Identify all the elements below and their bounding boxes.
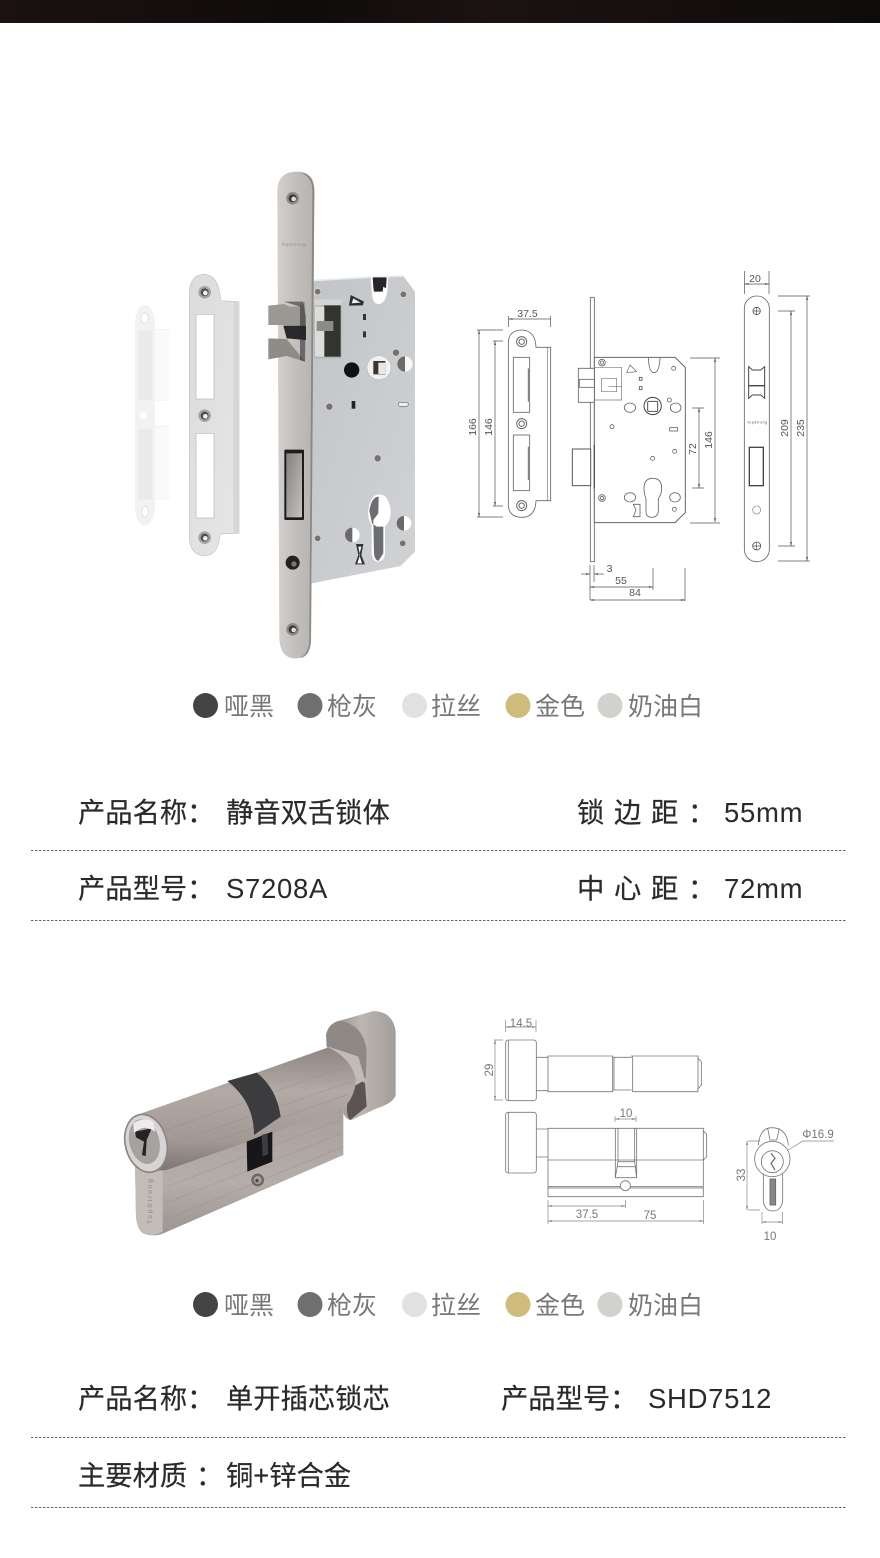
colour swatches: lock body: 金色 <box>535 693 585 721</box>
dimensions: lock front view: 209 <box>779 419 791 437</box>
dimensions: cylinder: 14.5 <box>510 1018 532 1030</box>
dimensions: cylinder <box>484 1018 834 1243</box>
technical drawing: cylinder top and front views <box>506 1040 707 1197</box>
colour swatches: cylinder <box>193 1292 703 1320</box>
dimensions: lock side view: 84 <box>629 587 641 599</box>
spec table: cylinder: 单开插芯锁芯 <box>226 1383 390 1414</box>
dimensions: strike plate: 146 <box>483 418 495 436</box>
dimensions: lock front view: 20 <box>749 273 761 285</box>
screws <box>314 288 407 547</box>
technical drawing: lock front view: TopStrong <box>747 421 767 425</box>
spec table: cylinder: SHD7512 <box>648 1383 772 1414</box>
colour swatches: cylinder: 拉丝 <box>431 1292 481 1320</box>
steel strike plate <box>189 274 239 556</box>
colour swatches: cylinder: 金色 <box>535 1292 585 1320</box>
lock case <box>312 276 415 583</box>
colour swatches: cylinder: 哑黑 <box>224 1292 274 1320</box>
spec table: lock body <box>31 797 847 920</box>
dimensions: strike plate <box>467 308 551 517</box>
technical drawing: lock front view <box>744 296 769 562</box>
dimensions: lock front view <box>744 271 810 561</box>
colour swatches: lock body: 哑黑 <box>224 693 274 721</box>
latch tongues <box>268 302 306 362</box>
spec table: lock body: 产品名称： <box>78 797 214 828</box>
dimensions: cylinder: 33 <box>736 1169 748 1181</box>
dimensions: lock side view: 72 <box>687 443 699 455</box>
spec table: cylinder <box>31 1383 847 1508</box>
spec table: lock body: 中心距： <box>577 873 715 904</box>
photo: mortise lock body with strike plates <box>135 172 415 658</box>
spec table: lock body: 锁边距： <box>577 797 715 828</box>
cylinder lower plug body <box>135 1105 343 1235</box>
dimensions: cylinder: 75 <box>644 1210 656 1222</box>
dimensions: cylinder: 37.5 <box>576 1209 598 1221</box>
technical drawing: cylinder end view <box>755 1128 790 1211</box>
colour swatches: lock body: 枪灰 <box>327 693 377 721</box>
spec table: cylinder: 产品名称： <box>78 1383 214 1414</box>
dimensions: lock front view: 235 <box>795 419 807 437</box>
dimensions: lock side view <box>581 358 720 601</box>
spec table: lock body: 55mm <box>724 797 803 828</box>
top dark wood band <box>0 0 880 23</box>
dimensions: cylinder: 10 <box>620 1108 632 1120</box>
spec table: lock body: 72mm <box>724 873 803 904</box>
colour swatches: lock body: 奶油白 <box>628 693 703 721</box>
white plastic strike box <box>135 305 169 525</box>
key face <box>119 1110 173 1177</box>
colour swatches: cylinder: 奶油白 <box>628 1292 703 1320</box>
spec table: lock body: 静音双舌锁体 <box>226 797 390 828</box>
spec table: lock body: S7208A <box>226 873 328 904</box>
rubber band and slot <box>227 1073 281 1186</box>
colour swatches: lock body <box>193 693 703 721</box>
colour swatches: lock body: 拉丝 <box>431 693 481 721</box>
face plate: TopStrong <box>282 242 306 247</box>
face plate <box>277 172 314 658</box>
dimensions: cylinder: 10 <box>764 1231 776 1243</box>
technical drawing: strike plate <box>508 330 551 517</box>
spec table: cylinder: 主要材质 <box>78 1460 187 1491</box>
dimensions: lock side view: 146 <box>703 431 715 449</box>
colour swatches: cylinder: 枪灰 <box>327 1292 377 1320</box>
dimensions: strike plate: 37.5 <box>517 308 538 320</box>
spec table: cylinder: ： <box>196 1460 223 1491</box>
thumb turn <box>326 1011 396 1120</box>
cylinder lower plug body: TopStrong <box>147 1179 154 1224</box>
dimensions: lock side view: 55 <box>615 575 627 587</box>
dimensions: cylinder: Φ16.9 <box>802 1129 834 1141</box>
dimensions: strike plate: 166 <box>467 418 479 436</box>
dimensions: cylinder: 29 <box>484 1064 496 1076</box>
cylinder upper barrel <box>125 1047 356 1220</box>
technical drawing: lock side view <box>572 297 685 562</box>
dimensions: lock side view: 3 <box>607 563 613 575</box>
photo: key and thumb-turn cylinder <box>119 1011 396 1235</box>
spec table: cylinder: 铜+锌合金 <box>226 1460 351 1491</box>
spec table: lock body: 产品型号： <box>78 873 214 904</box>
spec table: cylinder: 产品型号： <box>501 1383 637 1414</box>
